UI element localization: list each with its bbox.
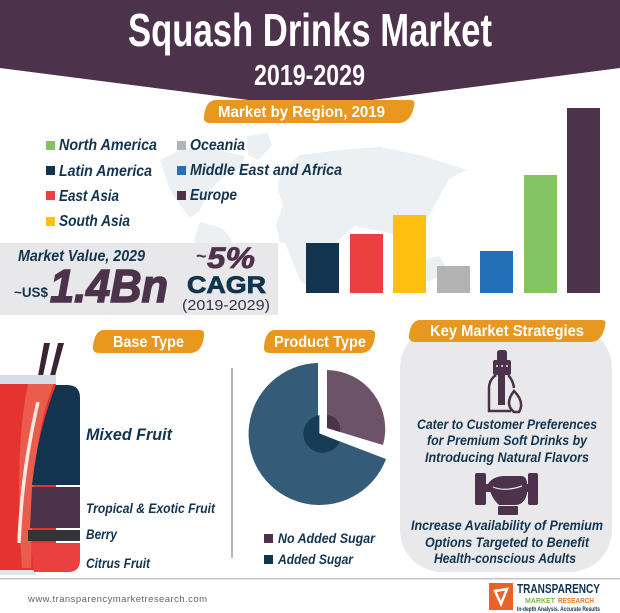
- logo: Transparency Market Research: MARKET: [525, 598, 556, 605]
- text: strategy two: Increase Availability of Premium: [411, 518, 603, 533]
- text: strategy one: for Premium Soft Drinks by: [427, 433, 588, 448]
- icon: dropper bottle with leaf: [489, 350, 521, 412]
- legend: product type: No Added Sugar: [278, 531, 376, 546]
- red: citrus fruit: [31, 543, 80, 572]
- subtitle: 2019-2029: [254, 60, 365, 92]
- legend: regions: Middle East and Africa: [190, 162, 342, 179]
- text: strategy one: [417, 417, 597, 465]
- callout: market value and CAGR: [0, 242, 278, 315]
- legend: regions: Europe: [190, 187, 237, 204]
- legend: product type: [264, 531, 376, 567]
- heading: market by region: [204, 100, 414, 123]
- heading: product type: Product Type: [274, 334, 366, 351]
- bar chart: market by region: [306, 108, 600, 293]
- purple: tropical and exotic fruit: [30, 487, 80, 528]
- heading: product type: [264, 330, 375, 353]
- heading: base type: [93, 330, 204, 353]
- labels: base type: Citrus Fruit: [86, 555, 151, 571]
- callout: market value and CAGR: ~: [196, 246, 207, 266]
- callout: market value and CAGR: (2019-2029): [182, 297, 270, 314]
- callout: market value and CAGR: 5%: [207, 242, 255, 275]
- text: strategy one: Cater to Customer Preferences: [417, 417, 597, 432]
- legend: regions: Oceania: [190, 137, 245, 154]
- website url: www.transparencymarketresearch.com: [27, 594, 207, 605]
- glass highlight: [19, 384, 54, 568]
- labels: base type: Mixed Fruit: [86, 425, 173, 444]
- legend: product type: Added Sugar: [277, 552, 354, 567]
- legend: regions: Latin America: [59, 163, 152, 180]
- navy: mixed fruit: [32, 385, 80, 485]
- heading: market by region: Market by Region, 2019: [218, 104, 385, 121]
- callout: market value and CAGR: CAGR: [187, 272, 266, 299]
- icon: glass with stacked base type shares: [0, 343, 80, 575]
- icon: fist holding dumbbell: [475, 473, 538, 515]
- callout: market value and CAGR: Market Value, 2029: [18, 248, 145, 265]
- heading: key market strategies: Key Market Strategies: [430, 323, 584, 340]
- labels: base type: Berry: [86, 526, 118, 542]
- logo: Transparency Market Research: TRANSPARENCY: [517, 582, 601, 596]
- pie chart: product type: [249, 363, 386, 505]
- straws: [38, 343, 64, 376]
- dark: berry: [28, 530, 80, 541]
- callout: market value and CAGR: 1.4Bn: [50, 260, 168, 312]
- legend: regions: South Asia: [59, 213, 130, 230]
- header banner: [0, 0, 620, 108]
- text: strategy one: Introducing Natural Flavors: [425, 450, 589, 465]
- title: Squash Drinks Market: [128, 4, 492, 56]
- text: strategy two: [411, 518, 603, 566]
- legend: regions: East Asia: [59, 188, 119, 205]
- labels: base type: Tropical & Exotic Fruit: [86, 500, 216, 516]
- heading: key market strategies: [409, 320, 606, 342]
- logo: Transparency Market Research: In-depth Analysis. Accurate Results: [517, 607, 601, 613]
- legend: regions: North America: [59, 137, 157, 154]
- world map background: [160, 133, 467, 290]
- heading: base type: Base Type: [113, 334, 184, 351]
- logo: Transparency Market Research: [489, 582, 601, 613]
- labels: base type: [86, 425, 216, 571]
- callout: market value and CAGR: ~US$: [14, 284, 48, 300]
- text: strategy two: Health-conscious Adults: [434, 551, 576, 566]
- text: strategy two: Options Targeted to Benefit: [425, 535, 589, 550]
- legend: regions: [46, 137, 342, 230]
- logo: Transparency Market Research: RESEARCH: [558, 598, 594, 605]
- panel: key market strategies: [400, 320, 612, 572]
